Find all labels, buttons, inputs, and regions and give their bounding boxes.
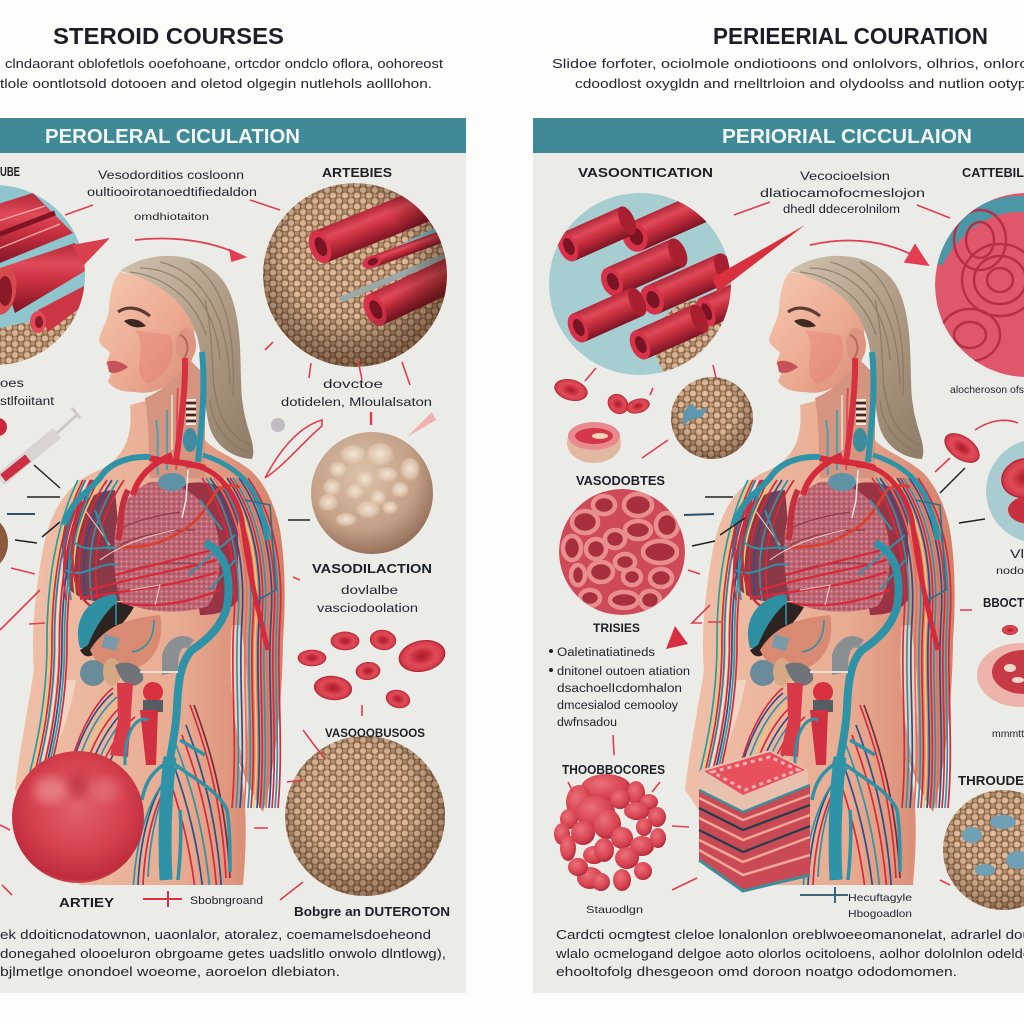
labels: dhedl ddecerolnilom — [783, 204, 900, 216]
subtitle: left: clndaorant oblofetlols ooefohoane, ortcdor ondclo oflora, oohoreost — [5, 56, 443, 71]
labels: CATTEBIL — [962, 165, 1024, 180]
labels: stlfoiitant — [0, 396, 55, 408]
labels: oultiooirotanoedtifiedaldon — [87, 187, 257, 199]
bullet list: Oaletinatiatineds — [557, 647, 655, 659]
labels: VASODILACTION — [312, 561, 432, 576]
labels: dlatiocamofocmeslojon — [760, 188, 925, 200]
labels: mmmtt — [992, 729, 1024, 740]
black leader lines — [692, 468, 985, 546]
red triangle marker — [666, 626, 688, 649]
labels: Stauodlgn — [586, 904, 643, 916]
labels: alocheroson ofs — [950, 384, 1024, 396]
circle: tubes — [0, 180, 110, 370]
sphere: mottled — [943, 790, 1024, 910]
blue pointer — [684, 514, 714, 515]
subtitle: right — [552, 56, 1024, 91]
labels: omdhiotaiton — [134, 212, 209, 223]
small red mark — [0, 418, 7, 436]
labels: ARTIEY — [59, 895, 114, 910]
bullet list: dmcesialod cemooloy — [557, 700, 678, 712]
edge disc: blood — [977, 643, 1024, 707]
sphere: large red — [12, 751, 144, 883]
right panel heading: PERIORIAL CICCULAION — [722, 126, 972, 148]
figure: right anatomy — [685, 256, 955, 934]
disc: red cell section — [567, 422, 621, 463]
pearl marker — [271, 418, 285, 432]
circle: catheter rolls — [935, 193, 1024, 377]
circle: red cells cross-section — [559, 489, 685, 615]
legend tick: hepatic — [800, 887, 848, 903]
labels: nodo — [996, 565, 1024, 577]
red cell fragments — [552, 376, 1018, 635]
footer text: right: Cardcti ocmgtest cleloe lonalonlon oreblwoeeomanonelat, adrarlel dou — [556, 928, 1024, 942]
labels: VASOOOBUSOOS — [325, 726, 425, 740]
pointer wedge — [712, 225, 805, 292]
cluster: thrombocytes — [554, 774, 666, 891]
right panel background — [533, 118, 1024, 993]
sphere: brown bumpy — [285, 736, 445, 896]
footer text: left — [0, 928, 446, 979]
edge circle: pale blue with cell — [986, 439, 1024, 543]
labels: vasciodoolation — [317, 603, 418, 615]
red blood cells — [298, 628, 448, 711]
labels: TRISIES — [593, 621, 640, 635]
subtitle: right: cdoodlost oxygldn and rnelltrloion and olydoolss and nutlion ootypl — [575, 76, 1024, 91]
labels: THROUDE — [958, 773, 1024, 788]
circle: vasoconstriction tubes — [549, 193, 731, 375]
circle: arteries — [263, 183, 447, 367]
labels: Vesodorditios cosloonn — [98, 168, 244, 182]
left panel background — [0, 118, 466, 993]
labels: VASODOBTES — [576, 474, 665, 488]
labels: dovlalbe — [341, 585, 398, 597]
labels: UBE — [0, 164, 20, 179]
footer text: left: donegahed olooeluron obrgoame getes uadslitlo onwolo dlntlowg), — [0, 947, 446, 961]
labels: Vecocioelsion — [800, 169, 890, 183]
labels — [562, 165, 1024, 920]
arrows — [568, 202, 1018, 890]
figure: left anatomy — [15, 256, 285, 934]
sphere: tan small — [671, 377, 753, 459]
subtitle: right: Slidoe forfoter, ociolmole ondiotioons ond onlolvors, olhrios, onloroi — [552, 56, 1024, 71]
left panel header band — [0, 118, 466, 153]
left panel heading: PEROLERAL CICULATION — [45, 126, 300, 148]
labels: ARTEBIES — [322, 165, 392, 180]
labels: dotidelen, Mloulalsaton — [281, 397, 432, 409]
labels: Hbogoadlon — [848, 908, 912, 920]
labels: Hecuftagyle — [848, 892, 912, 904]
labels: oes — [0, 378, 24, 390]
title: left: STEROID COURSES — [53, 23, 284, 49]
footer text: right: ehooltofolg dhesgeoon omd doroon noatgo ododomomen. — [556, 965, 957, 979]
footer text: right — [555, 928, 1024, 979]
subtitle: left: tlole oontlotsold dotooen and oletod olgegin nutlehols aolllohon. — [0, 76, 432, 91]
labels: Bobgre an DUTEROTON — [294, 904, 450, 919]
soft pink streak — [407, 412, 436, 437]
footer text: right: wlalo ocmelogand delgoe aoto olorlos ocitoloens, aolhor dololnlon odelde — [555, 947, 1024, 961]
labels: THOOBBOCORES — [562, 763, 665, 777]
bullet list: dsachoelIcdomhalon — [557, 683, 682, 695]
labels: VASOONTICATION — [578, 165, 713, 180]
title: right: PERIEERIAL COURATION — [713, 23, 988, 49]
bullet list — [549, 647, 690, 729]
right panel header band — [533, 118, 1024, 153]
panel: right — [533, 118, 1024, 993]
labels: dovctoe — [323, 379, 383, 391]
blue pointer — [7, 513, 35, 515]
footer text: left: ek ddoiticnodatownon, uaonlalor, atoralez, coemamelsdoeheond — [0, 928, 431, 942]
labels: Sbobngroand — [190, 895, 263, 907]
arrows — [0, 200, 410, 900]
small brown sphere at edge — [0, 513, 8, 573]
subtitle: left — [0, 56, 443, 91]
tissue block — [699, 750, 810, 891]
labels — [0, 164, 450, 919]
footer text: left: bjlmetlge onondoel woeome, aoroelon dlebiaton. — [0, 965, 340, 979]
syringe — [0, 408, 80, 480]
sphere: cream — [311, 432, 433, 554]
labels: Vl — [1010, 549, 1024, 561]
bullet list: dnitonel outoen atiation — [557, 666, 690, 678]
black leader lines — [15, 465, 310, 543]
bullet list: dwfnsadou — [557, 717, 617, 729]
legend tick: substrate — [143, 891, 182, 907]
panel: left — [0, 118, 466, 993]
